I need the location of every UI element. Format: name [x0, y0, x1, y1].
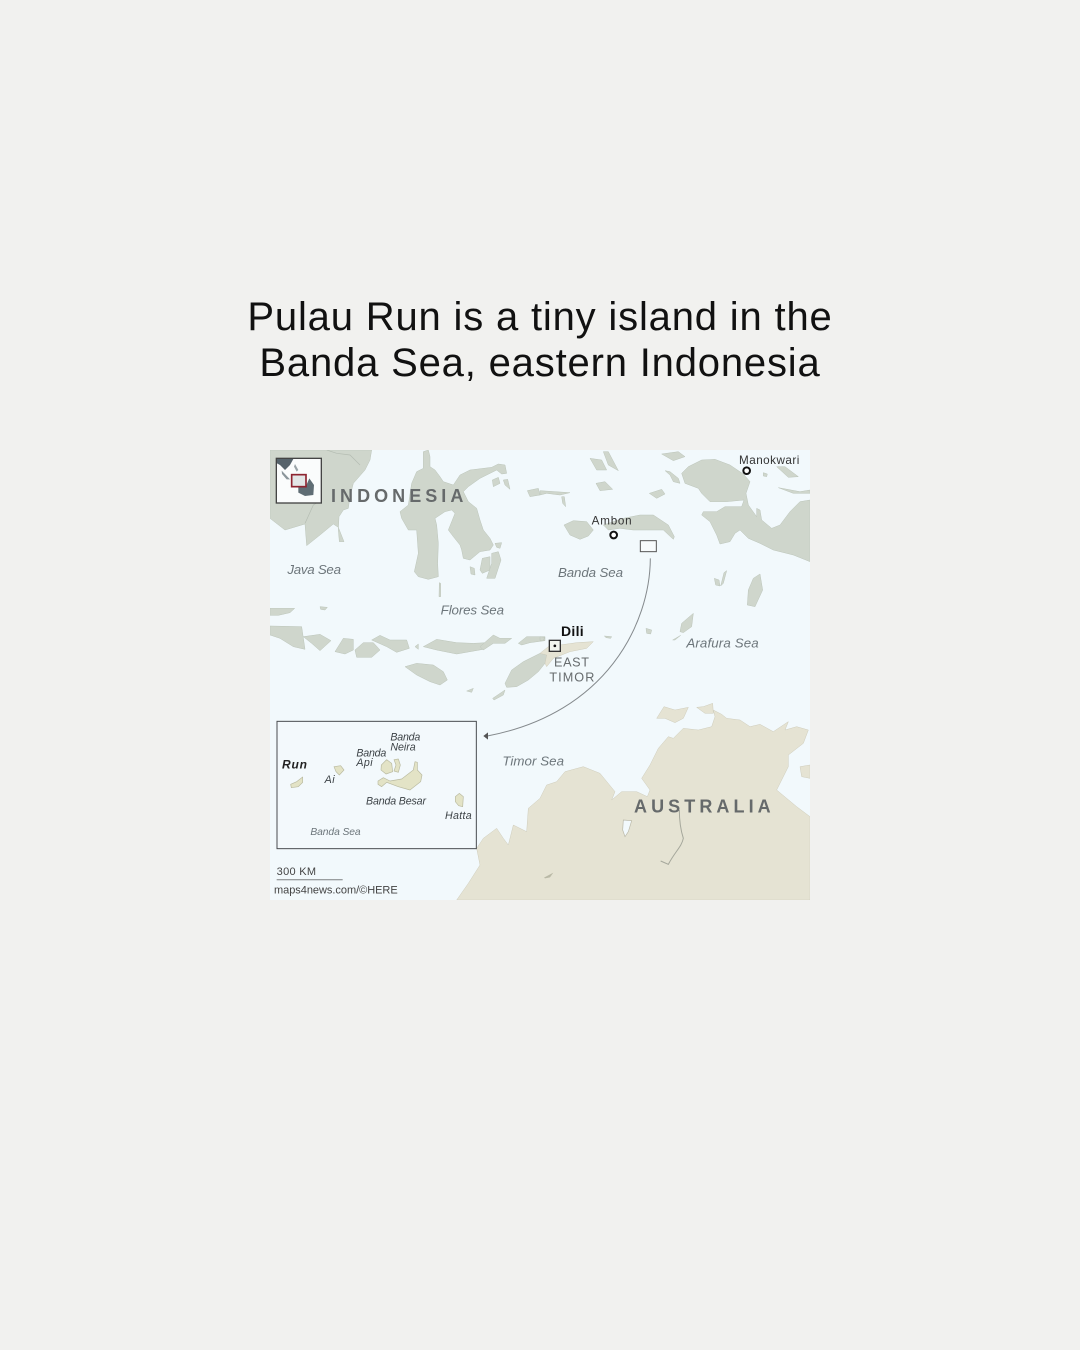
land: Borneo: [270, 450, 372, 546]
land: Sulawesi nearby islands: [439, 477, 540, 597]
land: Australia: [457, 703, 810, 900]
country label: East Timor: [549, 656, 594, 684]
country label: East Timor: EAST: [554, 656, 589, 670]
inset panel: Banda Islands: Hatta: [445, 810, 472, 822]
country label: Australia: AUSTRALIA: [634, 796, 771, 816]
land: East Timor: [540, 642, 593, 667]
inset islands: [291, 759, 463, 807]
inset panel: Banda Islands: Neira: [390, 741, 416, 753]
city: Ambon: Ambon: [592, 515, 632, 528]
city: Manokwari: [739, 454, 799, 474]
sea labels: Flores Sea: [441, 602, 504, 617]
city: Manokwari: Manokwari: [739, 454, 799, 467]
capital: Dili: Dili: [561, 623, 584, 639]
inset panel: Banda Islands: Ai: [324, 774, 335, 786]
land: Maluku: [540, 452, 763, 641]
inset panel: Banda Islands: Banda Sea: [310, 827, 361, 838]
inset locator: world map: [276, 458, 321, 503]
inset panel: Banda Islands: Banda: [390, 732, 420, 744]
scale bar: [277, 866, 343, 880]
scale bar: 300 KM: [277, 866, 316, 878]
title: Banda Sea, eastern Indonesia: [259, 341, 821, 385]
arrow to inset: [483, 558, 650, 740]
source credit: maps4news.com/©HERE: [274, 885, 398, 897]
country label: Indonesia: INDONESIA: [331, 486, 463, 506]
land: Lesser Sunda Islands: [270, 607, 547, 700]
sea labels: Timor Sea: [502, 753, 564, 768]
country label: East Timor: TIMOR: [549, 670, 594, 684]
inset labels: Run: [282, 757, 307, 771]
sea labels: Java Sea: [286, 562, 341, 577]
inset panel: Banda Islands: [277, 721, 476, 849]
sea labels: Arafura Sea: [685, 636, 759, 651]
capital: Dili: [549, 623, 584, 651]
inset panel: Banda Islands: Banda Besar: [366, 796, 426, 808]
inset panel: Banda Islands: Banda: [356, 747, 386, 759]
land: Sulawesi: [400, 450, 507, 579]
land: New Guinea: [665, 459, 810, 562]
title: [247, 295, 833, 385]
inset panel: Banda Islands: Api: [355, 757, 373, 769]
city: Ambon: [592, 515, 632, 538]
map: [270, 450, 810, 900]
locator rectangle: [640, 541, 656, 552]
sea labels: [286, 562, 759, 768]
title: Pulau Run is a tiny island in the: [247, 295, 833, 339]
sea labels: Banda Sea: [558, 565, 623, 580]
